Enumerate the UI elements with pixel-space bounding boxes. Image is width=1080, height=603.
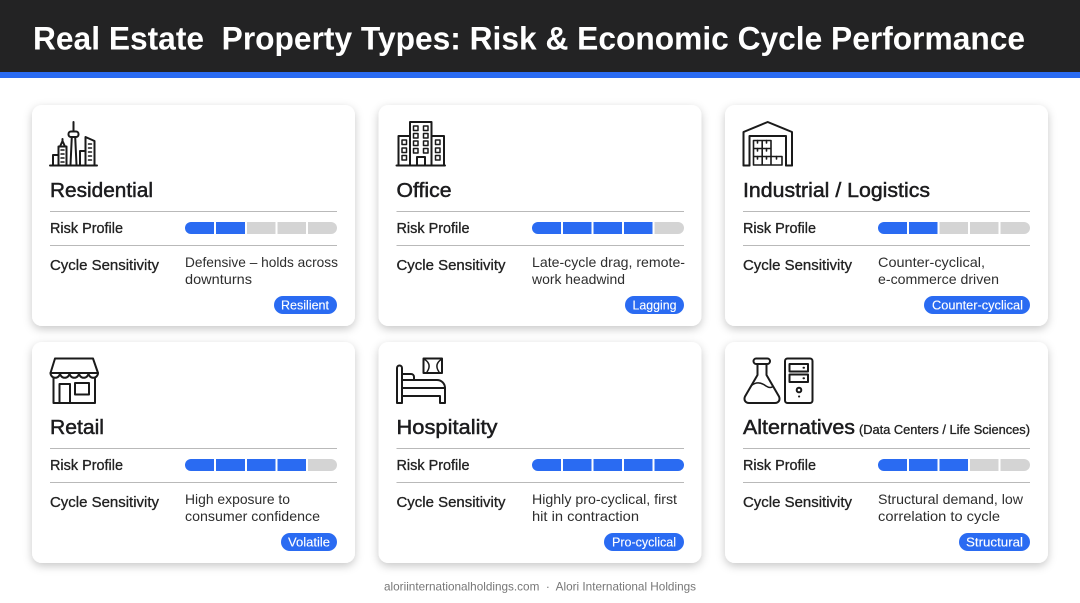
- description: [185, 491, 320, 524]
- description: work headwind: [531, 271, 625, 287]
- cycle label: Cycle Sensitivity: [743, 258, 853, 274]
- risk label: Risk Profile: [50, 458, 123, 474]
- heading: [743, 416, 1030, 439]
- panel: retail: [32, 342, 355, 563]
- risk label: Risk Profile: [50, 221, 123, 237]
- badge: Volatile: [288, 536, 330, 550]
- risk bar: [185, 459, 337, 471]
- heading: Retail: [50, 416, 104, 439]
- description: correlation to cycle: [878, 508, 1000, 524]
- heading: Industrial / Logistics: [743, 179, 930, 202]
- icon: city skyline: [50, 122, 97, 166]
- cycle label: Cycle Sensitivity: [50, 258, 160, 274]
- description: downturns: [185, 271, 252, 287]
- description: hit in contraction: [532, 508, 639, 524]
- header band: [0, 0, 1080, 78]
- risk label: Risk Profile: [396, 458, 470, 474]
- badge: [924, 296, 1030, 314]
- badge: [604, 533, 684, 551]
- badge: Counter-cyclical: [932, 298, 1023, 312]
- cycle label: Cycle Sensitivity: [396, 495, 506, 511]
- heading: Hospitality: [396, 416, 498, 439]
- risk bar: [185, 222, 337, 234]
- badge: [625, 296, 684, 314]
- risk bar: [532, 459, 684, 471]
- description: e-commerce driven: [878, 271, 999, 287]
- heading: Residential: [50, 179, 153, 202]
- risk bar: [878, 222, 1030, 234]
- badge: [274, 296, 337, 314]
- title: Real Estate Property Types: Risk & Economic Cycle Performance: [33, 20, 1025, 56]
- risk label: Risk Profile: [396, 221, 470, 237]
- panel: office: [378, 105, 702, 326]
- description: Highly pro-cyclical, first: [532, 491, 677, 507]
- badge: [959, 533, 1030, 551]
- panel: alternatives: [725, 342, 1048, 563]
- heading: Office: [396, 179, 452, 202]
- cycle label: Cycle Sensitivity: [396, 258, 506, 274]
- description: [185, 254, 338, 287]
- badge: [281, 533, 337, 551]
- badge: Lagging: [632, 298, 677, 312]
- cycle label: Cycle Sensitivity: [50, 495, 160, 511]
- icon: warehouse: [744, 122, 792, 166]
- heading: Alternatives: [743, 416, 855, 439]
- panel: residential: [32, 105, 355, 326]
- description: consumer confidence: [185, 508, 320, 524]
- cycle label: Cycle Sensitivity: [743, 495, 853, 511]
- badge: Resilient: [281, 298, 330, 312]
- panel: hospitality: [378, 342, 702, 563]
- badge: Pro-cyclical: [612, 536, 676, 550]
- description: High exposure to: [185, 491, 290, 507]
- description: Counter-cyclical,: [878, 254, 985, 270]
- risk bar: [878, 459, 1030, 471]
- risk label: Risk Profile: [743, 458, 816, 474]
- footer: aloriinternationalholdings.com · Alori International Holdings: [384, 580, 696, 594]
- icon: bed and picture: [397, 358, 445, 403]
- description: Defensive – holds across: [185, 254, 338, 270]
- panel: industrial: [725, 105, 1048, 326]
- description: Structural demand, low: [878, 491, 1024, 507]
- description: Late-cycle drag, remote-: [532, 254, 685, 270]
- icon: storefront: [50, 358, 98, 403]
- risk bar: [532, 222, 684, 234]
- badge: Structural: [966, 536, 1023, 550]
- description: [531, 254, 685, 287]
- icon: flask and server: [744, 358, 812, 403]
- description: [878, 491, 1024, 524]
- description: [532, 491, 677, 524]
- risk label: Risk Profile: [743, 221, 816, 237]
- icon: office building: [396, 122, 445, 166]
- heading: (Data Centers / Life Sciences): [859, 423, 1030, 437]
- description: [878, 254, 999, 287]
